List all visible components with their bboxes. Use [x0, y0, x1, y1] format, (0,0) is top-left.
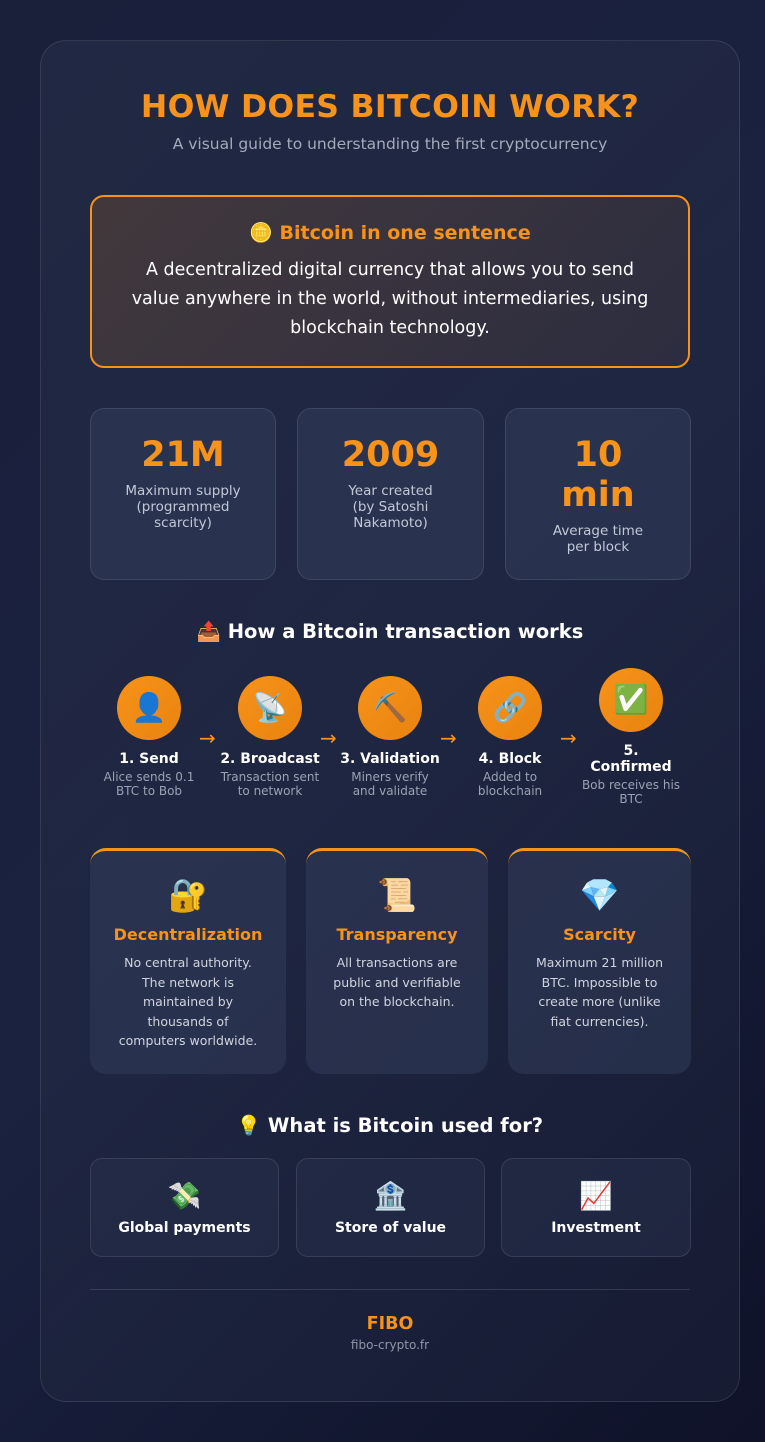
feature: scarcity	[508, 848, 691, 1074]
footer url: fibo-crypto.fr	[351, 1338, 429, 1352]
step 5: BTC	[619, 792, 643, 806]
stat: year: Nakamoto)	[353, 515, 428, 531]
stat: block time: Average time	[553, 523, 643, 539]
panel: one sentence	[90, 195, 690, 368]
step 4	[478, 676, 542, 798]
stat: supply: 21M	[141, 435, 225, 475]
use: payments: 💸	[168, 1181, 201, 1212]
use: payments: Global payments	[118, 1220, 251, 1236]
step 4: Added to	[483, 770, 537, 784]
heading: transaction: 📤 How a Bitcoin transaction works	[197, 620, 583, 643]
arrow 4: →	[560, 726, 577, 750]
stat: supply: Maximum supply	[125, 483, 241, 499]
feature: decentralization	[90, 848, 286, 1074]
stat: supply	[90, 408, 276, 580]
stat: block time	[505, 408, 691, 580]
step 1: 1. Send	[119, 751, 179, 767]
heading: uses: 💡 What is Bitcoin used for?	[237, 1114, 543, 1137]
step 4: 4. Block	[479, 751, 541, 767]
feature: transparency: Transparency	[336, 925, 458, 944]
stat: supply: (programmed	[137, 499, 229, 515]
step 3: ⛏️	[373, 691, 407, 724]
feature: transparency: All transactions are	[337, 955, 457, 970]
feature: decentralization: maintained by	[143, 994, 233, 1009]
step 2: to network	[238, 784, 302, 798]
step 5: Bob receives his	[582, 778, 680, 792]
step 5: 5.	[623, 743, 639, 759]
stat: year: 2009	[342, 435, 439, 475]
stat: block time: min	[561, 475, 635, 515]
feature: scarcity: Maximum 21 million	[536, 955, 663, 970]
step 2: 📡	[253, 691, 287, 724]
step 1: BTC to Bob	[116, 784, 182, 798]
stat: block time: per block	[567, 539, 629, 555]
feature: scarcity: fiat currencies).	[550, 1014, 648, 1028]
feature: transparency: 📜	[377, 876, 417, 914]
step 3: Miners verify	[351, 770, 429, 784]
footer brand: FIBO	[367, 1314, 413, 1334]
stat: year	[297, 408, 484, 580]
heading: one sentence: 🪙 Bitcoin in one sentence	[249, 222, 531, 244]
use: store of value	[296, 1158, 485, 1257]
stat: year: Year created	[348, 483, 433, 499]
use: investment	[501, 1158, 691, 1257]
feature: scarcity: 💎	[580, 876, 619, 914]
step 2: Transaction sent	[221, 770, 319, 784]
use: store of value: 🏦	[374, 1181, 407, 1212]
feature: decentralization: No central authority.	[124, 955, 252, 970]
use: store of value: Store of value	[335, 1220, 446, 1236]
step 1: 👤	[132, 691, 166, 724]
step 2	[220, 676, 320, 798]
step 3: and validate	[353, 784, 427, 798]
subtitle: A visual guide to understanding the first cryptocurrency	[173, 135, 607, 153]
step 1: Alice sends 0.1	[104, 770, 194, 784]
step 3	[340, 676, 440, 798]
feature: transparency	[306, 848, 488, 1074]
arrow 1: →	[199, 726, 216, 750]
step 5: Confirmed	[590, 759, 672, 775]
arrow 3: →	[440, 726, 457, 750]
step 1	[104, 676, 194, 798]
step 5	[582, 668, 680, 806]
feature: decentralization: thousands of	[148, 1014, 228, 1028]
feature: scarcity: BTC. Impossible to	[542, 974, 657, 990]
feature: transparency: on the blockchain.	[339, 994, 455, 1009]
feature: decentralization: computers worldwide.	[119, 1033, 257, 1048]
stat: block time: 10	[574, 435, 622, 475]
feature: decentralization: 🔐	[168, 876, 208, 914]
feature: decentralization: Decentralization	[114, 925, 262, 944]
step 4: 🔗	[493, 691, 527, 724]
feature: scarcity: Scarcity	[563, 925, 636, 944]
arrow 2: →	[320, 726, 337, 750]
use: payments	[90, 1158, 279, 1257]
step 5: ✅	[614, 683, 648, 716]
feature: transparency: public and verifiable	[333, 974, 461, 990]
stat: supply: scarcity)	[154, 515, 212, 531]
use: investment: Investment	[551, 1220, 641, 1236]
feature: decentralization: The network is	[142, 974, 234, 990]
step 2: 2. Broadcast	[220, 751, 320, 767]
stat: year: (by Satoshi	[353, 499, 428, 515]
text: definition: A decentralized digital currency that allows you to send value anywhere in the world, without intermediaries, using blockchain technology.	[132, 260, 648, 338]
title: HOW DOES BITCOIN WORK?	[141, 89, 639, 125]
feature: scarcity: create more (unlike	[538, 994, 661, 1009]
step 3: 3. Validation	[340, 751, 440, 767]
use: investment: 📈	[579, 1181, 613, 1212]
step 4: blockchain	[478, 784, 542, 798]
